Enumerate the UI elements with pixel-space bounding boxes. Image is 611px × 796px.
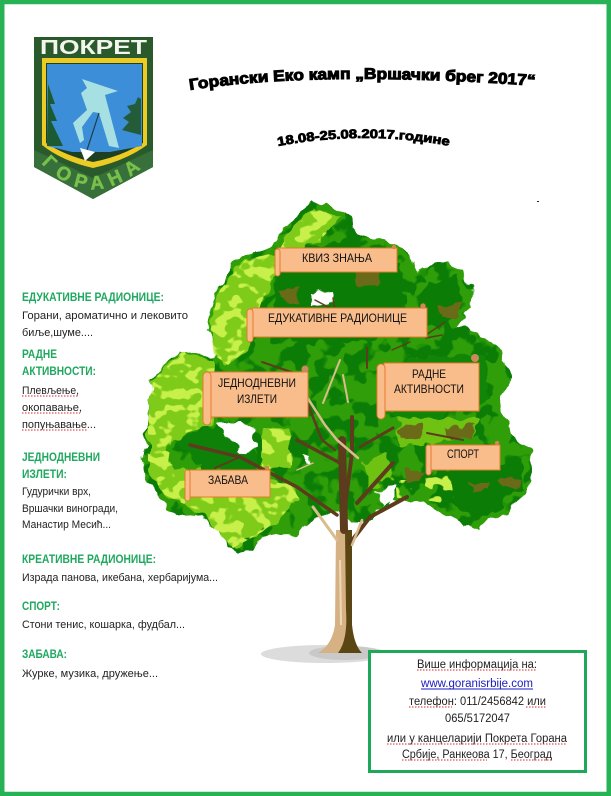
scroll: work activities: РАДНЕ: [412, 367, 446, 381]
scroll: one-day trips: ИЗЛЕТИ: [237, 392, 277, 406]
canopy light masses: [148, 208, 480, 548]
small dash: [537, 201, 539, 202]
scroll: one-day trips: [203, 366, 308, 425]
canopy base: [142, 202, 533, 553]
fun text: ЗАБАВА:: [22, 649, 67, 661]
website link: www.goranisrbije.com: [420, 678, 533, 690]
creative workshops text: Израда панова, икебана, хербаријума...: [22, 572, 218, 584]
shovel handle: [87, 113, 99, 150]
sport text: СПОРТ:: [22, 601, 60, 613]
work activities text: окопавање,: [22, 402, 82, 414]
ground shadow: [261, 645, 389, 663]
fun text: [22, 649, 158, 680]
plant: [122, 97, 141, 135]
one-day trips text: ИЗЛЕТИ:: [22, 469, 67, 481]
work activities text: РАДНЕ: [22, 349, 57, 361]
frame inner dark: [46, 63, 143, 162]
title: dates: 18.08-25.08.2017.године: [277, 128, 450, 146]
scroll: educational workshops: [247, 304, 427, 342]
scroll: work activities: АКТИВНОСТИ: [394, 382, 464, 396]
canopy dark speckle: [142, 202, 533, 553]
work activities text: АКТИВНОСТИ:: [22, 366, 96, 378]
office: или у канцеларији Покрета Горана: [387, 733, 568, 745]
title: camp name: Горански Еко камп „Вршачки брег 2017“: [188, 68, 536, 91]
canopy dark masses: [172, 240, 522, 518]
white gaps in canopy: [216, 290, 396, 507]
work activities text: [22, 349, 96, 431]
scroll: quiz: КВИЗ ЗНАЊА: [302, 251, 372, 265]
branches: [190, 298, 463, 543]
second phone: 065/5172047: [445, 713, 510, 725]
shield lower shade: [34, 150, 153, 199]
shovel: [80, 148, 95, 161]
fun text: Журке, музика, дружење...: [22, 668, 158, 680]
walking figure: [73, 79, 119, 148]
one-day trips text: Манастир Месић...: [22, 519, 111, 531]
phone: телефон: 011/2456842 или: [409, 696, 546, 708]
one-day trips text: ЈЕДНОДНЕВНИ: [22, 452, 100, 464]
yellow frame: [42, 58, 147, 168]
educational workshops text: Горани, ароматично и лековито: [22, 310, 188, 322]
left column: activity list: [22, 292, 218, 680]
one-day trips text: Гудурички врх,: [22, 486, 91, 498]
scroll: fun: ЗАБАВА: [208, 473, 248, 487]
logo word top: ПОКРЕТ: [40, 37, 147, 59]
educational workshops text: ЕДУКАТИВНЕ РАДИОНИЦЕ:: [22, 292, 164, 304]
sport text: [22, 601, 185, 631]
educational workshops text: биље,шуме....: [22, 327, 93, 339]
creative workshops text: [22, 554, 218, 584]
trunk: [318, 530, 362, 653]
scroll: one-day trips: ЈЕДНОДНЕВНИ: [218, 376, 296, 390]
sport text: Стони тенис, кошарка, фудбал...: [22, 619, 185, 631]
address: Србије, Ранкеова 17, Београд: [402, 749, 552, 761]
work activities text: попуњавање...: [22, 419, 96, 431]
educational workshops text: [22, 292, 188, 339]
blue field: [47, 64, 142, 152]
one-day trips text: [22, 452, 118, 531]
canopy bright highlights: [148, 208, 455, 548]
fir tree: [47, 84, 63, 146]
logo: Pokret Gorana shield: ГОРАНА: [42, 154, 141, 190]
scroll: quiz: [275, 245, 397, 276]
brown leaf patches: [280, 270, 520, 492]
logo word bottom: [41, 160, 150, 189]
info text: Више информација на:: [417, 659, 537, 671]
scroll: educational workshops: ЕДУКАТИВНЕ РАДИОНИЦЕ: [268, 311, 407, 325]
light branches: [297, 360, 362, 545]
scroll: sport: СПОРТ: [447, 447, 480, 461]
scroll: sport: [426, 441, 500, 475]
tree illustration: [142, 202, 533, 653]
creative workshops text: КРЕАТИВНЕ РАДИОНИЦЕ:: [22, 554, 156, 566]
one-day trips text: Вршачки виногради,: [22, 503, 118, 515]
work activities text: Плевљење,: [22, 385, 79, 397]
shield body: [34, 37, 153, 199]
info box frame: [370, 652, 586, 772]
scroll: fun: [185, 466, 270, 501]
info box: [370, 652, 586, 772]
scroll: work activities: [377, 354, 479, 419]
logo: Pokret Gorana shield: [34, 37, 153, 199]
